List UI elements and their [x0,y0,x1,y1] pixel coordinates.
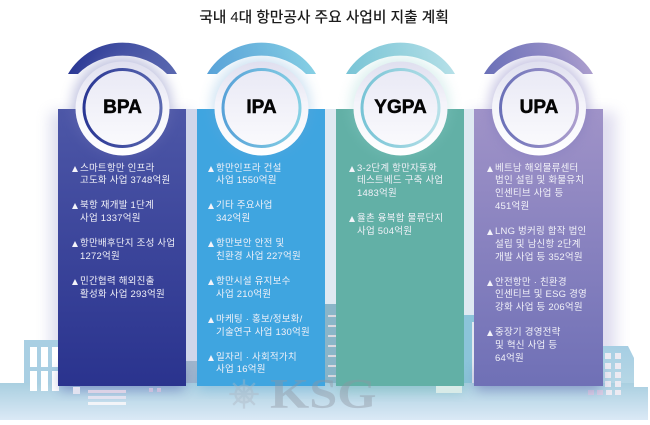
text: UPA items: 64억원 [495,353,524,364]
text: UPA items: 인센티브 및 ESG 경영 [495,289,587,300]
text: UPA items: 451억원 [495,201,529,212]
text: IPA items: 항만인프라 건설 [216,163,282,174]
text: UPA items: LNG 벙커링 합작 법인 [495,226,586,237]
text: IPA items: 항만시설 유지보수 [216,276,291,287]
text: BPA items: 북항 재개발 1단계 [80,200,154,211]
text: YGPA items [349,162,443,237]
text: UPA items: 강화 사업 등 206억원 [495,302,583,313]
text: BPA items: 1272억원 [80,251,120,262]
text: IPA items: 친환경 사업 227억원 [216,251,301,262]
arcs [68,43,593,74]
text: YGPA items: 1483억원 [357,188,397,199]
circles [72,56,589,156]
text: UPA items: 법인 설립 및 화물유치 [495,175,584,186]
text: BPA items: 고도화 사업 3748억원 [80,175,170,186]
heading: IPA: IPA [246,97,277,118]
text: IPA items: 기술연구 사업 130억원 [216,327,310,338]
text: UPA items: 중장기 경영전략 [495,327,561,338]
text: IPA items: 기타 주요사업 [216,200,273,211]
icon: ship wheel [230,379,258,408]
text: IPA items: 일자리 · 사회적가치 [216,352,297,363]
text: UPA items: 인센티브 사업 등 [495,188,563,199]
text: UPA items: 및 혁신 사업 등 [495,340,557,351]
text: YGPA items: 테스트베드 구축 사업 [357,175,443,186]
text: BPA items: 민간협력 해외진출 [80,276,155,287]
windows [30,347,59,391]
title: 국내 4대 항만공사 주요 사업비 지출 계획 [199,10,449,26]
text: IPA items: 마케팅 · 홍보/정보화/ [216,314,303,325]
text: BPA items: 항만배후단지 조성 사업 [80,238,175,249]
text: YGPA items: 사업 504억원 [357,226,412,237]
heading: BPA: BPA [103,97,142,118]
watermark: KSG: KSG [270,372,376,418]
text: IPA items: 342억원 [216,213,250,224]
heading: UPA: UPA [520,97,558,118]
text: IPA items [208,162,310,375]
text: BPA items: 사업 1337억원 [80,213,141,224]
text: UPA items [487,162,587,364]
text: UPA items: 설립 및 남신항 2단계 [495,239,581,250]
text: IPA items: 사업 16억원 [216,364,266,375]
text: BPA items [72,162,175,300]
text: UPA items: 개발 사업 등 352억원 [495,252,583,263]
text: UPA items: 안전항만 · 친환경 [495,277,567,288]
text: BPA items: 스마트항만 인프라 [80,163,155,174]
heading: YGPA: YGPA [374,97,427,118]
text: YGPA items: 3-2단계 항만자동화 [357,163,437,174]
text: IPA items: 사업 1550억원 [216,175,277,186]
text: IPA items: 항만보안 안전 및 [216,238,284,249]
text: BPA items: 활성화 사업 293억원 [80,289,165,300]
text: IPA items: 사업 210억원 [216,289,271,300]
text: YGPA items: 율촌 융복합 물류단지 [357,213,443,224]
text: UPA items: 베트남 해외물류센터 [495,163,578,174]
